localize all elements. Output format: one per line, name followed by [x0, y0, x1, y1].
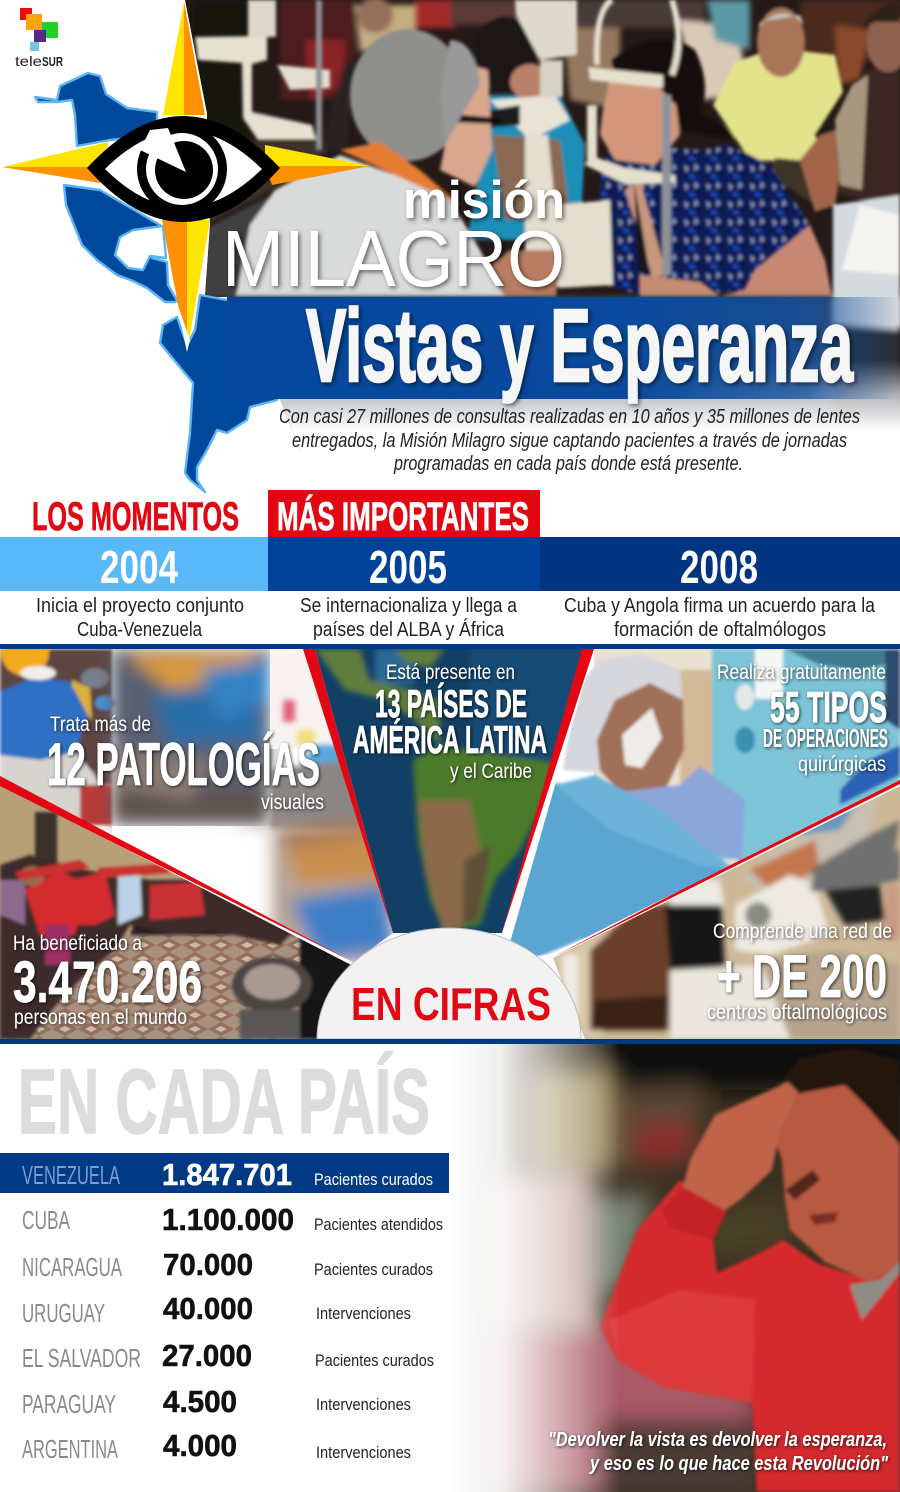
table row: Cuba: 1.100.000	[162, 1202, 294, 1237]
title banner	[227, 297, 900, 399]
telesur logo: SUR	[42, 54, 63, 69]
stat: 13 países: Está presente en	[386, 661, 515, 684]
timeline: 2005: 2005	[369, 541, 447, 593]
heading: más importantes	[268, 490, 540, 539]
stat: 3.470.206: Ha beneficiado a	[13, 932, 142, 955]
stat: más de 200	[707, 920, 892, 1024]
lower photo zone	[228, 297, 900, 457]
stat: 3.470.206: 3.470.206	[13, 950, 202, 1015]
Gulf of Mexico	[115, 226, 166, 270]
timeline: 2008: formación de oftalmólogos	[614, 619, 826, 641]
headrest	[588, 67, 663, 88]
table row: Uruguay: URUGUAY	[22, 1298, 105, 1328]
en cifras badge	[317, 928, 581, 1039]
en cifras badge: EN CIFRAS	[351, 978, 551, 1030]
table row: Paraguay	[22, 1384, 411, 1419]
stat: 12 patologías	[47, 713, 324, 814]
timeline: 2004: 2004	[100, 541, 178, 593]
photo panel: patient with eye patch	[510, 649, 900, 956]
table row: El Salvador: Pacientes curados	[315, 1351, 434, 1370]
map of the Americas	[35, 73, 298, 492]
timeline: 2005: Se internacionaliza y llega a	[300, 595, 518, 617]
stat: 13 países: y el Caribe	[450, 760, 532, 783]
timeline: 2008: 2008	[680, 541, 758, 593]
stat: 13 países	[353, 661, 547, 783]
microscope right	[490, 95, 570, 135]
table row: Uruguay: 40.000	[163, 1291, 253, 1326]
heading: los momentos: LOS MOMENTOS	[32, 495, 239, 539]
table row: Nicaragua	[22, 1247, 433, 1282]
intro paragraph	[279, 406, 860, 475]
table row: Nicaragua: NICARAGUA	[22, 1252, 122, 1282]
table row: Cuba	[22, 1202, 443, 1237]
timeline: 2005	[268, 537, 540, 641]
photo panel: ophthalmic exam	[553, 780, 900, 1040]
table row: El Salvador: EL SALVADOR	[22, 1343, 141, 1373]
table row: Nicaragua: Pacientes curados	[314, 1260, 433, 1279]
photo panel: parade figure	[0, 628, 400, 969]
stat: 3.470.206	[13, 932, 202, 1029]
table row: Venezuela: VENEZUELA	[22, 1160, 120, 1190]
telesur logo: tele	[15, 53, 42, 69]
Mexico and Central America	[64, 185, 178, 302]
papers / white table	[833, 195, 900, 327]
telesur logo	[15, 8, 63, 69]
hero photo: eye examination	[185, 0, 900, 457]
timeline: 2004	[0, 537, 268, 641]
quote	[548, 1429, 888, 1475]
table row: Venezuela: 1.847.701	[162, 1157, 292, 1192]
eye emblem	[87, 116, 280, 222]
teen in teal	[474, 17, 538, 93]
red divider bands	[0, 649, 900, 962]
South America	[160, 295, 298, 492]
timeline: 2004: Inicia el proyecto conjunto	[36, 595, 244, 617]
stat: 3.470.206: personas en el mundo	[14, 1006, 187, 1029]
table row: Cuba: Pacientes atendidos	[314, 1215, 443, 1234]
North America	[35, 73, 157, 146]
table row: Argentina: ARGENTINA	[22, 1434, 118, 1464]
photo: salute portrait	[450, 1030, 900, 1492]
timeline: 2005: países del ALBA y África	[313, 618, 505, 641]
stat: 13 países: AMÉRICA LATINA	[353, 718, 547, 762]
table row: Venezuela: Pacientes curados	[314, 1170, 433, 1189]
microscope left	[195, 36, 316, 140]
heading: en cada país: EN CADA PAÍS	[18, 1050, 430, 1153]
stat: 12 patologías: 12 PATOLOGÍAS	[47, 731, 320, 798]
dress of patient	[600, 145, 810, 295]
doctor	[350, 29, 466, 161]
timeline: 2008	[540, 537, 900, 641]
patient hair, face	[612, 40, 735, 140]
table row: Paraguay: 4.500	[163, 1384, 237, 1419]
stat: 12 patologías: Trata más de	[50, 713, 151, 736]
logo wordmark: MILAGRO: MILAGRO	[222, 214, 565, 303]
table row: Argentina: 4.000	[163, 1428, 237, 1463]
stat: 12 patologías: visuales	[261, 791, 324, 814]
intro paragraph: programadas en cada país donde está presente.	[393, 453, 743, 475]
table row: Venezuela	[0, 1153, 449, 1193]
table row: Paraguay: PARAGUAY	[22, 1389, 116, 1419]
table row: El Salvador: 27.000	[162, 1338, 252, 1373]
yellow shirt man	[713, 48, 843, 163]
photo panel: satellite map	[315, 649, 585, 939]
woman in printed blouse, right	[835, 65, 900, 205]
heading: más importantes: MÁS IMPORTANTES	[277, 494, 529, 539]
compass star	[2, 2, 370, 352]
table row: Uruguay	[22, 1291, 411, 1328]
stat: 13 países: 13 PAÍSES DE	[375, 682, 527, 726]
en cifras panel: navy top border	[0, 644, 900, 649]
photo panel: crowd with raised hands	[0, 780, 360, 1042]
logo wordmark: misión: misión	[403, 171, 565, 230]
en cifras panel: navy bottom border	[0, 1039, 900, 1044]
table row: Uruguay: Intervenciones	[316, 1304, 411, 1323]
timeline: 2004: Cuba-Venezuela	[77, 619, 203, 641]
table row: Cuba: CUBA	[22, 1205, 70, 1235]
table row: Argentina	[22, 1428, 411, 1464]
table row: Nicaragua: 70.000	[163, 1247, 253, 1282]
table row: Argentina: Intervenciones	[316, 1443, 411, 1462]
stat: 55 tipos	[717, 661, 888, 776]
table row: El Salvador	[22, 1338, 434, 1373]
stat: 55 tipos: quirúrgicas	[798, 753, 886, 776]
table row: Paraguay: Intervenciones	[316, 1395, 411, 1414]
